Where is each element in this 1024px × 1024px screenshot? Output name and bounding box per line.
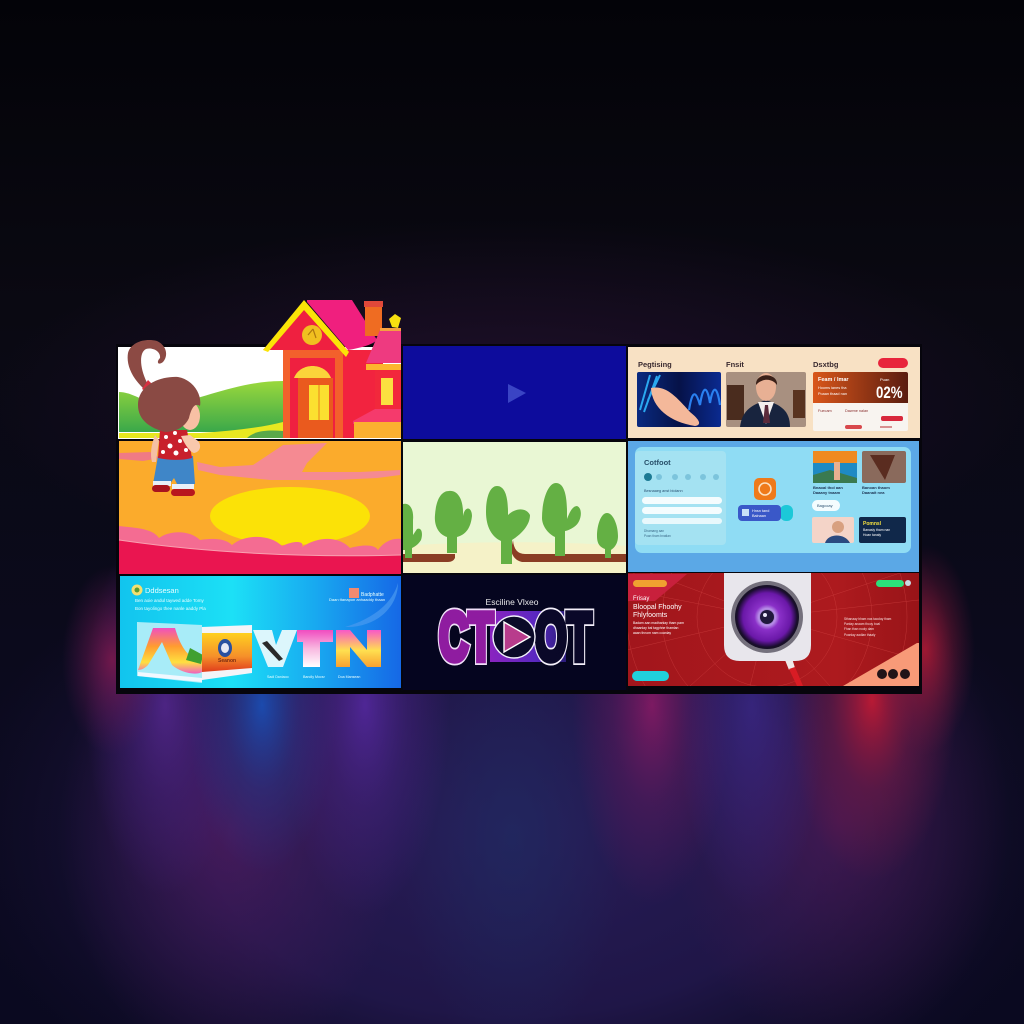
panel: bottom-left colorful letters: Ben aoie andul taywed adde Tomy (135, 598, 204, 603)
panel: peach web layout: Fnsit (726, 360, 744, 369)
panel: red camera feature: Bloopal Fhoohy (633, 604, 682, 611)
legs jeans (153, 456, 195, 484)
chimney (365, 303, 382, 336)
panel: red camera feature: Fhlyfoomts (633, 612, 668, 619)
cable (786, 661, 803, 686)
stat card: Fuecam (818, 409, 832, 413)
peach triangle (843, 643, 919, 686)
form card: Cotfoot (644, 458, 671, 467)
head hair (138, 377, 200, 432)
title CTOOT: OT (535, 598, 592, 675)
stat card: Puan (880, 377, 889, 382)
panel: blue dashboard (628, 441, 919, 572)
form card: Poan tham bnatlan (644, 534, 671, 538)
image cards: Bagcoay (817, 503, 833, 508)
camera body (724, 573, 811, 661)
form card: Dhamang aan (644, 529, 664, 533)
letter Y (253, 630, 297, 667)
cyan button (632, 671, 669, 681)
cactus 5 (597, 513, 618, 558)
cactus 1 (403, 504, 422, 558)
letter A (137, 622, 203, 683)
left copy: Frisay (633, 596, 649, 602)
stat card: Dawme nalan (845, 409, 868, 413)
panel: bottom-left colorful letters (120, 576, 401, 688)
house illustration (263, 300, 401, 438)
hand image (637, 372, 721, 427)
letter N (336, 630, 381, 667)
stat card: Feam / lmar (818, 377, 849, 383)
panel: cartoon landscape top (118, 347, 401, 439)
image cards: Daaany tnaam (813, 490, 841, 495)
shirt (158, 430, 192, 460)
shoes (152, 485, 170, 492)
girl character (128, 340, 200, 496)
form card (635, 451, 726, 545)
panel: red camera feature: Poanlay aadlan thaaly (844, 633, 876, 637)
panel: cactus scene (403, 442, 626, 573)
blue pill button (738, 505, 793, 521)
social icons (877, 669, 910, 679)
panel: red camera feature: Fhan than nooly dam (844, 627, 874, 631)
title CTOOT: CT (439, 598, 493, 675)
panel: bottom-left colorful letters: Daan ttanapon anhaaddy thaan (329, 597, 385, 602)
stat card: Poaan thaad nan (818, 392, 847, 396)
play badge (493, 616, 535, 658)
hair bow (142, 380, 156, 394)
red pill (878, 358, 908, 368)
blue pill button: Hnsn tand (752, 509, 769, 513)
panel: bottom-left colorful letters: Dddsesan (145, 586, 179, 595)
pink corner (627, 574, 687, 601)
orange app icon (754, 478, 776, 500)
form card: Besnaaeg anst biolann (644, 489, 683, 493)
subtitle: Esciline Vlxeo (486, 597, 539, 607)
play icon (508, 384, 526, 403)
green pill (876, 580, 904, 587)
side wing (366, 330, 401, 363)
image cards (812, 451, 906, 543)
image cards: Banoan thaom (862, 485, 890, 490)
screen window: Seanon (218, 658, 236, 664)
screen window (202, 625, 252, 680)
camera lens (731, 581, 803, 653)
panel: peach web layout: Dsxtbg (813, 360, 839, 369)
image cards: Daanait nea (862, 490, 885, 495)
panel: red camera feature: dhaanlay bal tagphne thamlan (633, 626, 679, 630)
panel: red camera feature: Badam aan madhanlay tham pam (633, 621, 684, 625)
panel: bottom-left colorful letters: Doa Mansean (338, 675, 360, 679)
stat card (813, 372, 908, 431)
stat card: 02% (876, 384, 903, 402)
ground strips (403, 554, 455, 562)
pink path (197, 443, 400, 480)
panel: bottom-left colorful letters: Bandly Mocsr (303, 675, 326, 679)
panel: dark video title (403, 575, 626, 690)
arms (151, 435, 159, 462)
right copy: Sthanaay bham nas tacolay tham (844, 617, 892, 621)
stat card: Hooms ianes tha (818, 386, 847, 390)
panel: red camera feature: Panlay anaam thooy boal (844, 622, 880, 626)
panel: peach web layout (628, 347, 920, 438)
panel: cartoon ground (119, 441, 401, 574)
panel divider lines (401, 345, 628, 691)
panel: red camera feature: aaan thnom nam coanlay (633, 631, 671, 635)
blue pill button: Balnaan (752, 514, 766, 518)
panel: red camera feature (628, 573, 919, 686)
yellow pond (210, 487, 370, 545)
captions: Sadi Daniaoo (267, 675, 289, 679)
title CTOOT: OT (535, 598, 592, 675)
face (180, 402, 200, 430)
image cards: Hoan tanaly (863, 533, 881, 537)
clock (302, 325, 322, 345)
pink clouds (119, 526, 401, 560)
logo and header text (132, 584, 142, 596)
cactus 2 (435, 491, 472, 553)
image cards: Pomnsl (863, 521, 882, 527)
image cards: Banasly tham nan (863, 528, 890, 532)
pink roof (307, 300, 377, 350)
ponytail (128, 340, 166, 390)
finial (389, 314, 401, 328)
panel: bottom-left colorful letters: Badphatte (361, 592, 384, 598)
cactus 3 (486, 486, 530, 564)
man image (726, 372, 806, 427)
title CTOOT (439, 598, 592, 675)
house body (283, 350, 383, 438)
front gable (263, 301, 348, 354)
letter T (297, 630, 333, 667)
panel: bottom-left colorful letters: Bon tayolingo thee nanle aaddy Pla (135, 606, 206, 611)
door window (309, 385, 329, 420)
panel: blue with play icon (403, 346, 626, 439)
image cards: Bnaoal thol aan (813, 485, 843, 490)
hills (119, 381, 283, 432)
title CTOOT: CT (439, 598, 493, 675)
cactus 4 (542, 483, 581, 556)
headings: Pegtising (638, 360, 672, 369)
